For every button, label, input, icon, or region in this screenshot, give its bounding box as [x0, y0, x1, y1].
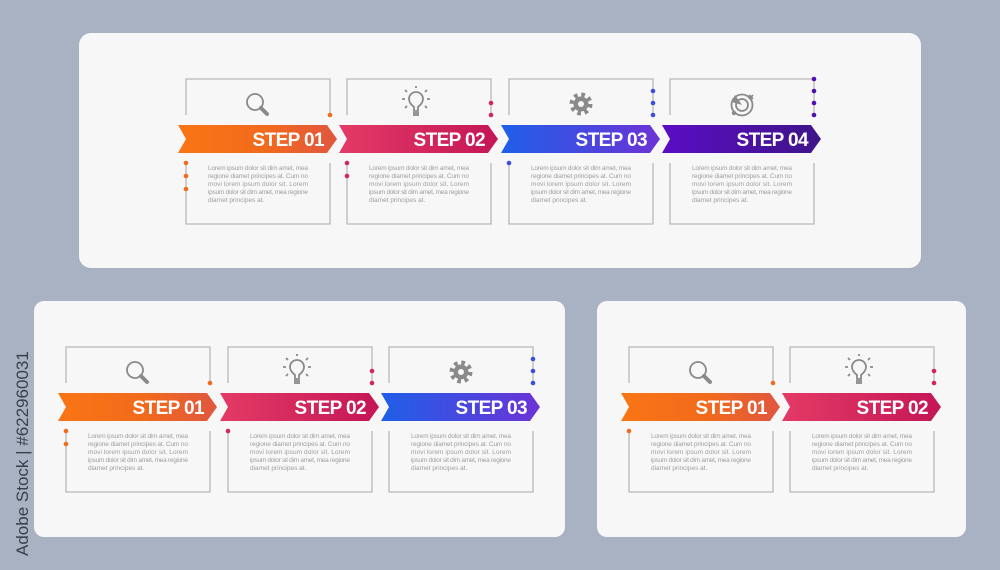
- step 02 bottom-right: [782, 347, 941, 492]
- step 02 bottom-left: [220, 347, 379, 492]
- step 03 top: STEP 03: [576, 130, 647, 151]
- step 01 bottom-left: [58, 347, 217, 492]
- step 03 bottom-left: [381, 347, 540, 492]
- step 02 bottom-right: STEP 02: [856, 398, 928, 419]
- step 02 top: [339, 79, 498, 224]
- step 03 top: [501, 79, 660, 224]
- panel: top four steps: [79, 33, 921, 268]
- step 01 bottom-right: [621, 347, 780, 492]
- step 03 bottom-left: STEP 03: [456, 398, 527, 419]
- step 02 bottom-left: STEP 02: [294, 398, 366, 419]
- step 01 bottom-right: STEP 01: [696, 398, 768, 419]
- panel: bottom-left three steps: [34, 301, 565, 537]
- step 01 bottom-left: STEP 01: [132, 398, 205, 419]
- step 01 top: [178, 79, 337, 224]
- panel: bottom-right two steps: [597, 301, 966, 537]
- step 04 top: STEP 04: [736, 130, 809, 151]
- step 01 top: STEP 01: [252, 130, 325, 151]
- step 04 top: [662, 77, 821, 224]
- watermark: vertical Adobe Stock text: Adobe Stock | #622960031: [13, 351, 32, 556]
- step 02 top: STEP 02: [414, 130, 485, 151]
